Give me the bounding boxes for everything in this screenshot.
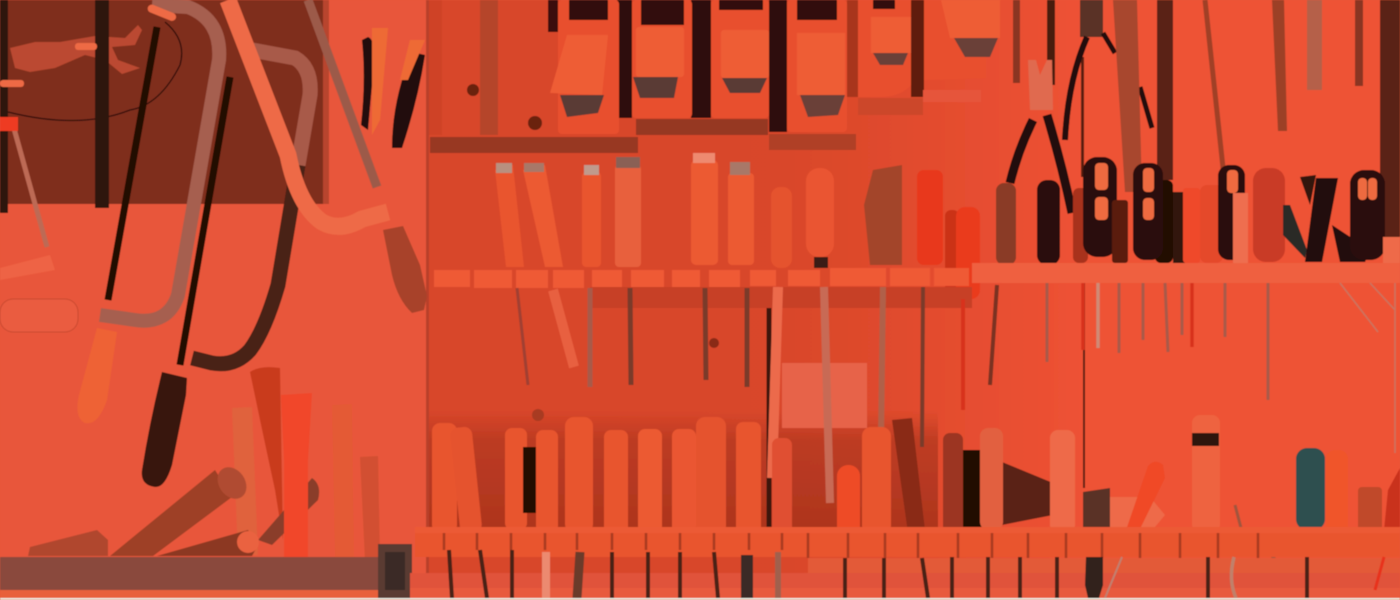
upper chisels bbox=[495, 153, 834, 268]
mallets bottom left bbox=[28, 367, 380, 560]
clamp bar bottom left bbox=[0, 544, 412, 598]
hacksaw 1 bbox=[77, 3, 219, 423]
upper hanging blades bbox=[517, 283, 1395, 530]
lower hanging blades bbox=[449, 550, 1384, 598]
pliers and hanging tools top right bbox=[1010, 0, 1400, 237]
dark gaps between planes bbox=[480, 0, 924, 135]
lower chisels bbox=[432, 417, 963, 537]
white bottom edge bbox=[0, 598, 1400, 600]
hand saw blade and lower right handles bbox=[963, 415, 1400, 567]
upper screwdrivers bbox=[864, 157, 1400, 300]
row of wood planes bbox=[550, 0, 1000, 134]
wooden ledges under planes bbox=[430, 90, 981, 153]
hanging small knives bbox=[361, 28, 425, 148]
hand saw 3 bbox=[228, 0, 427, 313]
upper rack bars bbox=[434, 263, 1400, 308]
left edge small tools bbox=[0, 0, 109, 332]
dark board top left bbox=[5, 0, 329, 204]
hacksaw 2 bbox=[142, 50, 310, 487]
lower tool rack shelf bbox=[410, 527, 1400, 598]
